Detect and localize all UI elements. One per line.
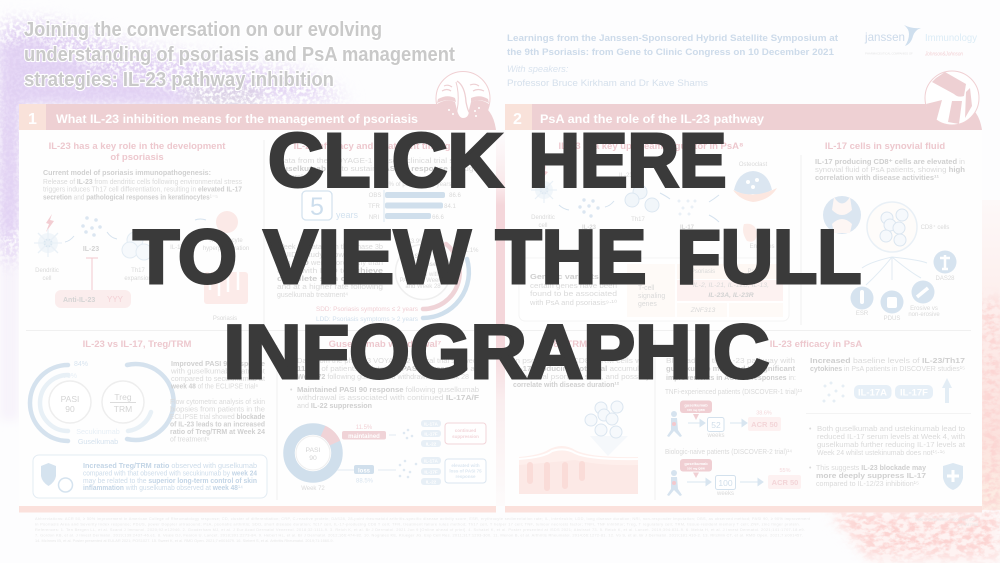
footnotes: 14. McInnes IB, et al. Poster presented at EULAR 2021; POS1027. 15. Sweet K, et al. RMD Open. 2021;7:e001679. 16. Siebert S, et al. Arthritis Rheumatol. 2019;71:1660-9. xyxy=(35,538,334,543)
overlay call to action: CLICK xyxy=(268,118,503,204)
labels: Dendritic xyxy=(531,215,555,221)
label: Th17 xyxy=(131,268,145,274)
dose pill: guselkumab xyxy=(684,461,708,466)
genes table xyxy=(627,264,783,317)
donut chart: PASI 90: 90 xyxy=(309,455,317,462)
loss branch: loss of PASI 75 xyxy=(449,468,482,474)
text: ECLIPSE: Flow cytometric analysis of skin xyxy=(170,399,265,406)
block: IL-17 cells in synovial fluid: IL-17 producing CD8⁺ cells are elevated in xyxy=(815,159,965,166)
arrow xyxy=(687,478,711,486)
callout: Treg/TRM ratio: Increased Treg/TRM ratio observed with guselkumab xyxy=(83,463,257,470)
labels: IL-17 xyxy=(680,225,695,231)
text: ECLIPSE: of IL-23 leads to an increased xyxy=(170,422,265,428)
Th17 cells xyxy=(122,232,152,260)
label: cell xyxy=(42,276,52,282)
section number: 2 xyxy=(513,111,522,128)
bar chart: OBS xyxy=(369,193,381,199)
labels: Entheses xyxy=(749,244,775,250)
dose pill: guselkumab xyxy=(684,402,708,408)
radial chart: SDD vs LDD: Super xyxy=(414,254,432,260)
genetic box: found to be associated xyxy=(530,291,617,298)
symposium info: With speakers: xyxy=(507,64,569,74)
block: efficacy text: Biologic-naive patients (DISCOVER-2 trial)¹⁴ xyxy=(665,449,792,456)
genes table: T-cell xyxy=(638,285,655,292)
keratinocyte: hyperproliferation xyxy=(203,246,249,252)
heading: IL-23 vs IL-17, Treg/TRM xyxy=(83,339,191,350)
heading: IL-23 is a key upstream regulator in PsA⁸ xyxy=(558,141,744,152)
IL-23 dots xyxy=(578,198,600,218)
loss branch: elevated with xyxy=(451,463,480,468)
text: ECLIPSE: ratio of Treg/TRM at Week 24 xyxy=(170,429,265,436)
psoriasis skin xyxy=(204,272,248,322)
GUIDE text xyxy=(276,244,384,299)
5 years callout: years xyxy=(336,210,359,220)
overlay call to action xyxy=(133,118,862,395)
genes table: IL-23A, IL-23R xyxy=(708,292,754,299)
radial chart: SDD vs LDD: 51.1% xyxy=(461,248,479,254)
footnotes: References: 1. Ten Bergen LL, et al. Scand J Immunol. 2020;92:e12946. 2. Gooderham MJ, et al. J Eur Acad Dermatol Venereol. 2018;32:1111-9. 3. Reich K, et al. Br J Dermatol. 2021 Jun 9 [Online ahead of print]. 4. Schakel K, et al. Poster presented at ISDS 2021; Abstract 73. 5. Reich K, et al. Lancet. 2019;394:831-9. 6. Mehta H, et al. J Invest Dermatol. 2021;141:1707-18.e9. xyxy=(35,527,805,532)
arrow xyxy=(730,420,747,426)
arrow up xyxy=(942,378,952,403)
pathogenesis diagram xyxy=(34,211,249,322)
block: withdrawal: 11.5% of patients maintained PASI 90 response at xyxy=(297,366,477,373)
overlay call to action: FULL xyxy=(676,215,862,300)
donut chart: PASI 90: PASI xyxy=(306,447,321,454)
labels: Osteoclast xyxy=(739,162,767,168)
icon: osteoclast xyxy=(733,171,777,202)
dose pill xyxy=(680,459,712,478)
bar chart: NRI xyxy=(369,215,379,221)
footer bar xyxy=(505,506,982,512)
icon: dendritic cell xyxy=(531,177,557,203)
ring charts: PASI 90 and Treg/TRM: Treg xyxy=(114,392,132,402)
block: efficacy text: improvements in ACR 50 responses in: xyxy=(666,375,796,382)
inhibition bar xyxy=(86,258,98,290)
label: IL-17 xyxy=(170,245,184,251)
ACR 50 result xyxy=(768,468,801,489)
radial chart: SDD vs LDD: 43.9% xyxy=(407,239,425,245)
Th17 cells xyxy=(625,185,659,212)
block: IL-17 cells in synovial fluid: synovial fluid of PsA patients, showing high xyxy=(815,167,965,174)
block: withdrawal: withdrawal is associated with continued IL-17A/F xyxy=(296,395,479,402)
icon: entheses xyxy=(743,224,757,242)
block: IL-23 key role: triggers induces Th17 cell differentiation, resulting in elevated IL-17 xyxy=(43,186,242,194)
bar chart: 66.6 xyxy=(432,215,444,221)
anti-IL-23 pill: Anti-IL-23 xyxy=(63,297,95,304)
cytokine dots xyxy=(678,200,696,216)
callout: Treg/TRM ratio: compared with that observed with secukinumab by week 24 xyxy=(83,470,257,478)
symposium info xyxy=(507,33,838,88)
text: ECLIPSE: ECLIPSE trial showed blockade xyxy=(170,414,265,421)
block: IL-17 cells in synovial fluid xyxy=(815,141,965,182)
pathogenesis diagram: IL-23 xyxy=(83,246,99,253)
section number: 1 xyxy=(28,111,37,128)
anti-IL-23 pill xyxy=(55,290,131,308)
icon: shield xyxy=(41,463,56,486)
text: ECLIPSE: compared to secukinumab at xyxy=(171,376,265,383)
genes table: PsA xyxy=(747,269,759,275)
genes table: IL-2, IL-21, IL-12B, IL-13, xyxy=(693,282,769,289)
block: IL-17 cells in synovial fluid: IL-17 cells in synovial fluid xyxy=(825,141,945,152)
GUIDE text: Week 28 data from the phase 3b xyxy=(277,244,383,251)
loss branch: IL-17A xyxy=(424,458,439,464)
callout: Treg/TRM ratio: may be related to the superior long-term control of skin xyxy=(83,478,257,485)
GUIDE text: guselkumab treatment⁴ xyxy=(277,292,348,299)
maintained branch: maintained xyxy=(348,434,380,440)
maintained branch: 11.5% xyxy=(356,425,373,431)
block: bullets: • xyxy=(809,465,812,472)
GUIDE text: those with LDD to achieve xyxy=(277,268,383,275)
block: IL-17 cells in synovial fluid: correlation with disease activities¹¹ xyxy=(815,175,940,182)
background splash: pink xyxy=(496,130,1000,563)
legend: SDD: Psoriasis symptoms ≤ 2 years xyxy=(316,306,419,313)
block: efficacy text: TNFi-experienced patients (DISCOVER-1 trial)¹³ xyxy=(665,389,803,396)
GUIDE text: and at a higher rate following xyxy=(277,284,383,291)
text: ECLIPSE xyxy=(170,361,265,444)
overlay call to action: HERE xyxy=(528,118,726,204)
icon: erosive: non-erosive xyxy=(908,312,940,318)
5 years callout xyxy=(302,191,359,221)
block: treatment timing: IL-23 efficacy and treatment timing xyxy=(294,141,451,152)
label: expansion xyxy=(124,276,152,282)
block: TRM: In psoriatic skin CD8⁺ TRM cells with xyxy=(513,358,650,365)
footer bar xyxy=(19,506,496,512)
label: Dendritic xyxy=(35,268,59,274)
panel: section 1 xyxy=(19,72,496,512)
block: withdrawal: Guselkumab withdrawal⁷ xyxy=(329,339,441,350)
block: efficacy text: Blockade of the IL-23 pathway with xyxy=(666,358,795,365)
block: DISCOVER cytokines: Increased baseline levels of IL-23/Th17 xyxy=(810,358,965,365)
footnotes: Date of preparation: December 2021 xyxy=(915,516,978,522)
pills: IL-17A xyxy=(858,388,887,398)
title: Joining the conversation on our evolving xyxy=(24,18,382,41)
psoriasis skin: Psoriasis xyxy=(213,316,237,322)
legend xyxy=(316,306,419,323)
block: DISCOVER cytokines xyxy=(810,358,965,403)
footnotes xyxy=(35,516,978,543)
anti-IL-23 pill: YYY xyxy=(107,295,124,304)
loss branch: IL-17F xyxy=(424,470,438,474)
labels: Th17 xyxy=(631,217,645,223)
genes table: genes xyxy=(638,301,657,308)
loss branch: response xyxy=(455,474,476,479)
genetic box: certain genes have been xyxy=(530,283,617,290)
icon: shield xyxy=(943,463,963,490)
footnotes: in Psoriasis Area and Severity Index response; PDUS, power Doppler ultrasound; PsA, psoriatic arthritis; SDD, short disease duration; Tc17 cell, IL-17-producing CD8 T cell; TFR, treatment failure rules method; Th17 cell, T helper 17 cell; TNF, tumour necrosis factor; TNFi, TNF inhibitor; Treg, T regulatory cell; TRM, tissue-resident memory T cell; ZNF, zinc finger protein. xyxy=(35,522,800,526)
ring charts: PASI 90 and Treg/TRM: 90 xyxy=(65,404,75,414)
icon: PDUS: PDUS xyxy=(884,316,900,322)
bar chart: TFR xyxy=(368,204,380,210)
janssen logo: Johnson&Johnson xyxy=(924,52,963,58)
title: strategies: IL-23 pathway inhibition xyxy=(24,68,334,91)
block: withdrawal xyxy=(290,339,479,410)
divider lines xyxy=(519,155,971,500)
ACR 50 result: 38.6% xyxy=(756,410,772,416)
keratinocyte xyxy=(203,211,249,252)
icon: ESR: ESR xyxy=(856,311,869,317)
block: treatment timing xyxy=(278,141,478,188)
5 years callout: 5 xyxy=(310,193,324,221)
connecting lines xyxy=(862,257,927,285)
icon: lightning xyxy=(46,214,54,232)
block: efficacy text xyxy=(665,358,803,456)
overlay call to action: THE xyxy=(496,215,646,300)
radial chart: SDD vs LDD: PASI 0 at Week 4 xyxy=(400,278,447,284)
ACR 50 result: ACR 50 xyxy=(772,478,798,487)
pills xyxy=(854,385,933,399)
symposium info: the 9th Psoriasis: from Gene to Clinic Congress on 10 December 2021 xyxy=(507,47,834,57)
panel background xyxy=(19,130,496,506)
icon: skin follicle xyxy=(436,72,490,130)
janssen logo: PHARMACEUTICAL COMPANIES OF xyxy=(865,52,913,56)
genetic box xyxy=(519,258,789,321)
maintained branch: continued xyxy=(455,428,476,433)
cell cluster: CD8⁺ cells xyxy=(921,224,949,231)
radial chart: SDD vs LDD: patients with xyxy=(406,272,440,278)
section number xyxy=(505,104,532,130)
text: ECLIPSE: week 48 of the ECLIPSE trial⁶ xyxy=(170,384,258,390)
block: efficacy text: guselkumab may lead to significant xyxy=(666,366,796,373)
ring charts: PASI 90 and Treg/TRM: Secukinumab xyxy=(76,427,120,436)
loss branch: 88.5% xyxy=(356,478,374,484)
arrow xyxy=(740,478,763,486)
title: understanding of psoriasis and PsA management xyxy=(24,43,455,66)
block: IL-23 key role xyxy=(43,141,243,202)
section heading: PsA and the role of the IL-23 pathway xyxy=(540,112,764,126)
block: DISCOVER cytokines: cytokines in PsA patients in DISCOVER studies¹⁵ xyxy=(810,366,965,373)
janssen logo: Immunology xyxy=(925,32,978,44)
IL-23 dots xyxy=(81,216,102,237)
ACR 50 result: 55% xyxy=(779,468,791,474)
maintained branch: IL-17A xyxy=(424,422,439,426)
block: TRM: correlate with disease duration¹² xyxy=(513,382,620,389)
block: bullets: more deeply suppress IL-17 xyxy=(816,473,926,480)
janssen logo: janssen xyxy=(864,30,905,44)
symposium info: Learnings from the Janssen-Sponsored Hybrid Satellite Symposium at xyxy=(507,33,838,43)
label xyxy=(35,268,59,282)
genetic box: with PsA and psoriasis⁹⋅¹⁰ xyxy=(529,299,617,307)
block: treatment timing: 5 years² xyxy=(278,174,304,181)
icon: dendritic cell xyxy=(34,229,62,257)
radial chart: SDD vs LDD: and Week 28 xyxy=(405,284,441,290)
arrow xyxy=(688,420,705,426)
section number xyxy=(19,104,46,130)
block: IL-23 key role: Current model of psoriasis immunopathogenesis: xyxy=(43,170,211,177)
block: bullets: Week 24 whilst ustekinumab does not¹⁵⋅¹⁶ xyxy=(817,450,945,457)
block: IL-23 key role: secretion and pathological responses in keratinocytes¹⁻⁵ xyxy=(43,194,218,202)
ring charts: PASI 90 and Treg/TRM: 84% xyxy=(74,361,88,368)
icon: lightning xyxy=(540,165,548,180)
100 weeks: weeks xyxy=(716,491,734,497)
title xyxy=(24,18,455,91)
genes table: signaling xyxy=(638,293,665,300)
block: treatment timing: Data from the VOYAGE-1 phase 3 clinical trial showed xyxy=(278,158,478,165)
maintained branch: IL-22 xyxy=(426,442,437,446)
donut chart: PASI 90: Week 72 xyxy=(301,486,325,492)
text: ECLIPSE: Improved PASI 90 response xyxy=(171,361,265,368)
labels: IL-23R xyxy=(619,173,638,179)
block: withdrawal: Data from the phase 3 VOYAGE 2 clinical trial showed xyxy=(297,358,477,365)
bar chart: 84.1 xyxy=(444,204,456,210)
loss branch: loss xyxy=(358,468,371,474)
text: ECLIPSE: biopsies from patients in the xyxy=(170,406,265,414)
icon: patient xyxy=(667,411,682,437)
block: treatment timing: guselkumab led to sustain PASI 90 response through xyxy=(278,166,478,173)
ACR 50 result: ACR 50 xyxy=(751,420,778,429)
GUIDE text: with SDD were more likely than xyxy=(276,260,383,267)
arrows xyxy=(65,219,206,242)
overlay call to action: INFOGRAPHIC xyxy=(224,310,770,395)
GUIDE text: GUIDE study showed patients xyxy=(277,252,384,259)
icon: clock xyxy=(58,478,72,492)
radial chart: SDD vs LDD: response xyxy=(410,262,437,268)
text: ECLIPSE: with guselkumab treatment xyxy=(170,368,265,376)
legend: LDD: Psoriasis symptoms > 2 years xyxy=(316,316,419,323)
block: bullets: • xyxy=(809,426,812,433)
dose pill xyxy=(680,400,712,420)
loss branch xyxy=(337,457,486,485)
ring charts: PASI 90 and Treg/TRM xyxy=(30,361,174,446)
block: withdrawal: Maintained PASI 90 response following guselkumab xyxy=(297,387,479,394)
TRM cell cluster xyxy=(585,401,628,456)
ring charts: PASI 90 and Treg/TRM: PASI xyxy=(61,394,79,404)
overlay call to action: TO xyxy=(133,215,237,300)
dose pill: 100 mg Q8W xyxy=(687,408,705,412)
pills: IL-17F xyxy=(900,388,928,398)
skin illustration xyxy=(519,446,638,494)
divider xyxy=(806,412,971,414)
synovial diagram xyxy=(823,196,956,322)
block: TRM: in lesional psoriasis sites, and possibly xyxy=(513,374,651,381)
bar chart xyxy=(368,190,461,222)
icon: erosive: Erosive vs xyxy=(910,306,938,312)
maintained branch xyxy=(342,420,486,447)
dots xyxy=(822,382,844,402)
block: IL-23 key role: of psoriasis xyxy=(110,152,164,163)
panel: section 2 xyxy=(505,71,982,512)
maintained branch: IL-17F xyxy=(424,432,438,436)
52 weeks xyxy=(706,418,725,439)
maintained branch: suppression xyxy=(452,434,479,439)
footnotes: CP-287789 xyxy=(958,522,978,527)
heading: IL-23 efficacy in PsA xyxy=(770,339,862,350)
52 weeks: weeks xyxy=(706,433,725,439)
labels: IL-23 xyxy=(582,225,597,231)
genetic box: Genetic variants with xyxy=(530,274,617,281)
arrows xyxy=(559,193,719,222)
loss branch: IL-22 xyxy=(426,480,437,484)
symposium info: Professor Bruce Kirkham and Dr Kave Shams xyxy=(507,78,708,88)
block: bullets: Both guselkumab and ustekinumab lead to xyxy=(817,426,965,433)
block: bullets: compared to IL-12/23 inhibition¹⁵ xyxy=(816,481,919,488)
block: bullets: reduced IL-17 serum levels at Week 4, with xyxy=(817,434,965,441)
ring charts: PASI 90 and Treg/TRM: Guselkumab xyxy=(78,437,118,446)
genes table: ZNF313 xyxy=(690,307,715,314)
divider lines xyxy=(26,140,485,500)
keratinocyte: Keratinocyte xyxy=(209,238,243,244)
block: TRM: IL-17 producing potential accumulate xyxy=(513,366,650,373)
janssen logo xyxy=(864,25,978,58)
section header bar xyxy=(532,104,982,130)
block: TRM xyxy=(513,339,651,389)
block: bullets xyxy=(809,426,965,488)
icon: knee joint xyxy=(925,71,979,125)
icon: joint xyxy=(823,196,861,234)
dose pill: 100 mg Q8W xyxy=(687,466,705,470)
block: treatment timing: % of patients at 5 years xyxy=(389,182,451,188)
pathway diagram xyxy=(531,162,777,250)
ring charts: PASI 90 and Treg/TRM: TRM xyxy=(114,404,132,414)
block: withdrawal: • xyxy=(290,387,293,394)
block: bullets: guselkumab further reducing IL-17 levels at xyxy=(817,442,965,449)
text: ECLIPSE: of treatment⁶ xyxy=(170,436,210,444)
icon: erosive xyxy=(908,280,940,318)
section header bar xyxy=(46,104,496,130)
genes table: Psoriasis xyxy=(691,269,715,275)
radial chart: SDD vs LDD xyxy=(396,239,479,318)
callout: Treg/TRM ratio xyxy=(33,455,267,498)
ring charts: PASI 90 and Treg/TRM: 70% xyxy=(63,373,77,380)
bar chart: 86.6 xyxy=(449,193,461,199)
100 weeks xyxy=(716,476,736,497)
footnotes: 7. Gordon KB, et al. J Invest Dermatol. 2019;139:2437-46.e1. 8. Veale DJ, Fearon U. Lancet. 2018;391:2273-84. 9. Hebert HL, et al. Br J Dermatol. 2012;166:474-82. 10. Nograles KE, Krueger JG. Exp Cell Res. 2011;317:1293-300. 11. Menon B, et al. Arthritis Rheumatol. 2014;66:1272-81. 12. Vo S, et al. Br J Dermatol. 2019;181:410-2. 13. Ritchlin CT, et al. RMD Open. 2021;7:e001457. xyxy=(35,532,803,538)
ACR 50 result xyxy=(748,410,781,431)
section heading: What IL-23 inhibition means for the management of psoriasis xyxy=(56,112,418,126)
donut chart: PASI 90 xyxy=(289,429,337,492)
panel background xyxy=(505,130,982,506)
overlay call to action: VIEW xyxy=(264,215,471,300)
block: IL-23 key role: IL-23 has a key role in the development xyxy=(49,141,226,152)
block: withdrawal: Week 72 following guselkumab withdrawal at Week 28 xyxy=(297,374,469,381)
icon: DAS28: DAS28 xyxy=(935,276,955,282)
labels xyxy=(531,162,775,250)
block: IL-23 key role: Release of IL-23 from dendritic cells following environmental stress xyxy=(43,179,243,186)
100 weeks: 100 xyxy=(718,478,733,488)
GUIDE text: complete skin clearance xyxy=(277,276,383,283)
52 weeks: 52 xyxy=(711,420,721,430)
footnotes: Abbreviations: ACR 50, ≥ 50% improvement in American College of Rheumatology response; CD, cluster of differentiation; CRP, C-reactive protein; DAS28, 28-point rheumatoid arthritis-specific disease activity score; ESR, erythrocyte sedimentation rate; IL, interleukin; LDD, long disease duration; NRI, non-responder imputation; OBS, as observed method; PASI 90, ≥ 90% improvement xyxy=(35,516,811,521)
icon: patient xyxy=(667,470,682,496)
callout: Treg/TRM ratio: inflammation with guselkumab observed at week 48¹⁴ xyxy=(83,485,243,492)
block: bullets: This suggests IL-23 blockade may xyxy=(816,465,926,472)
DISCOVER-2 flow xyxy=(667,459,801,497)
DISCOVER-1 flow xyxy=(667,400,781,439)
block: TRM: CD8⁺ TRM xyxy=(540,339,587,350)
background splash: purple xyxy=(0,22,350,420)
labels: cell xyxy=(538,223,548,229)
block: withdrawal: and IL-22 suppression xyxy=(297,403,372,410)
label xyxy=(124,268,152,282)
